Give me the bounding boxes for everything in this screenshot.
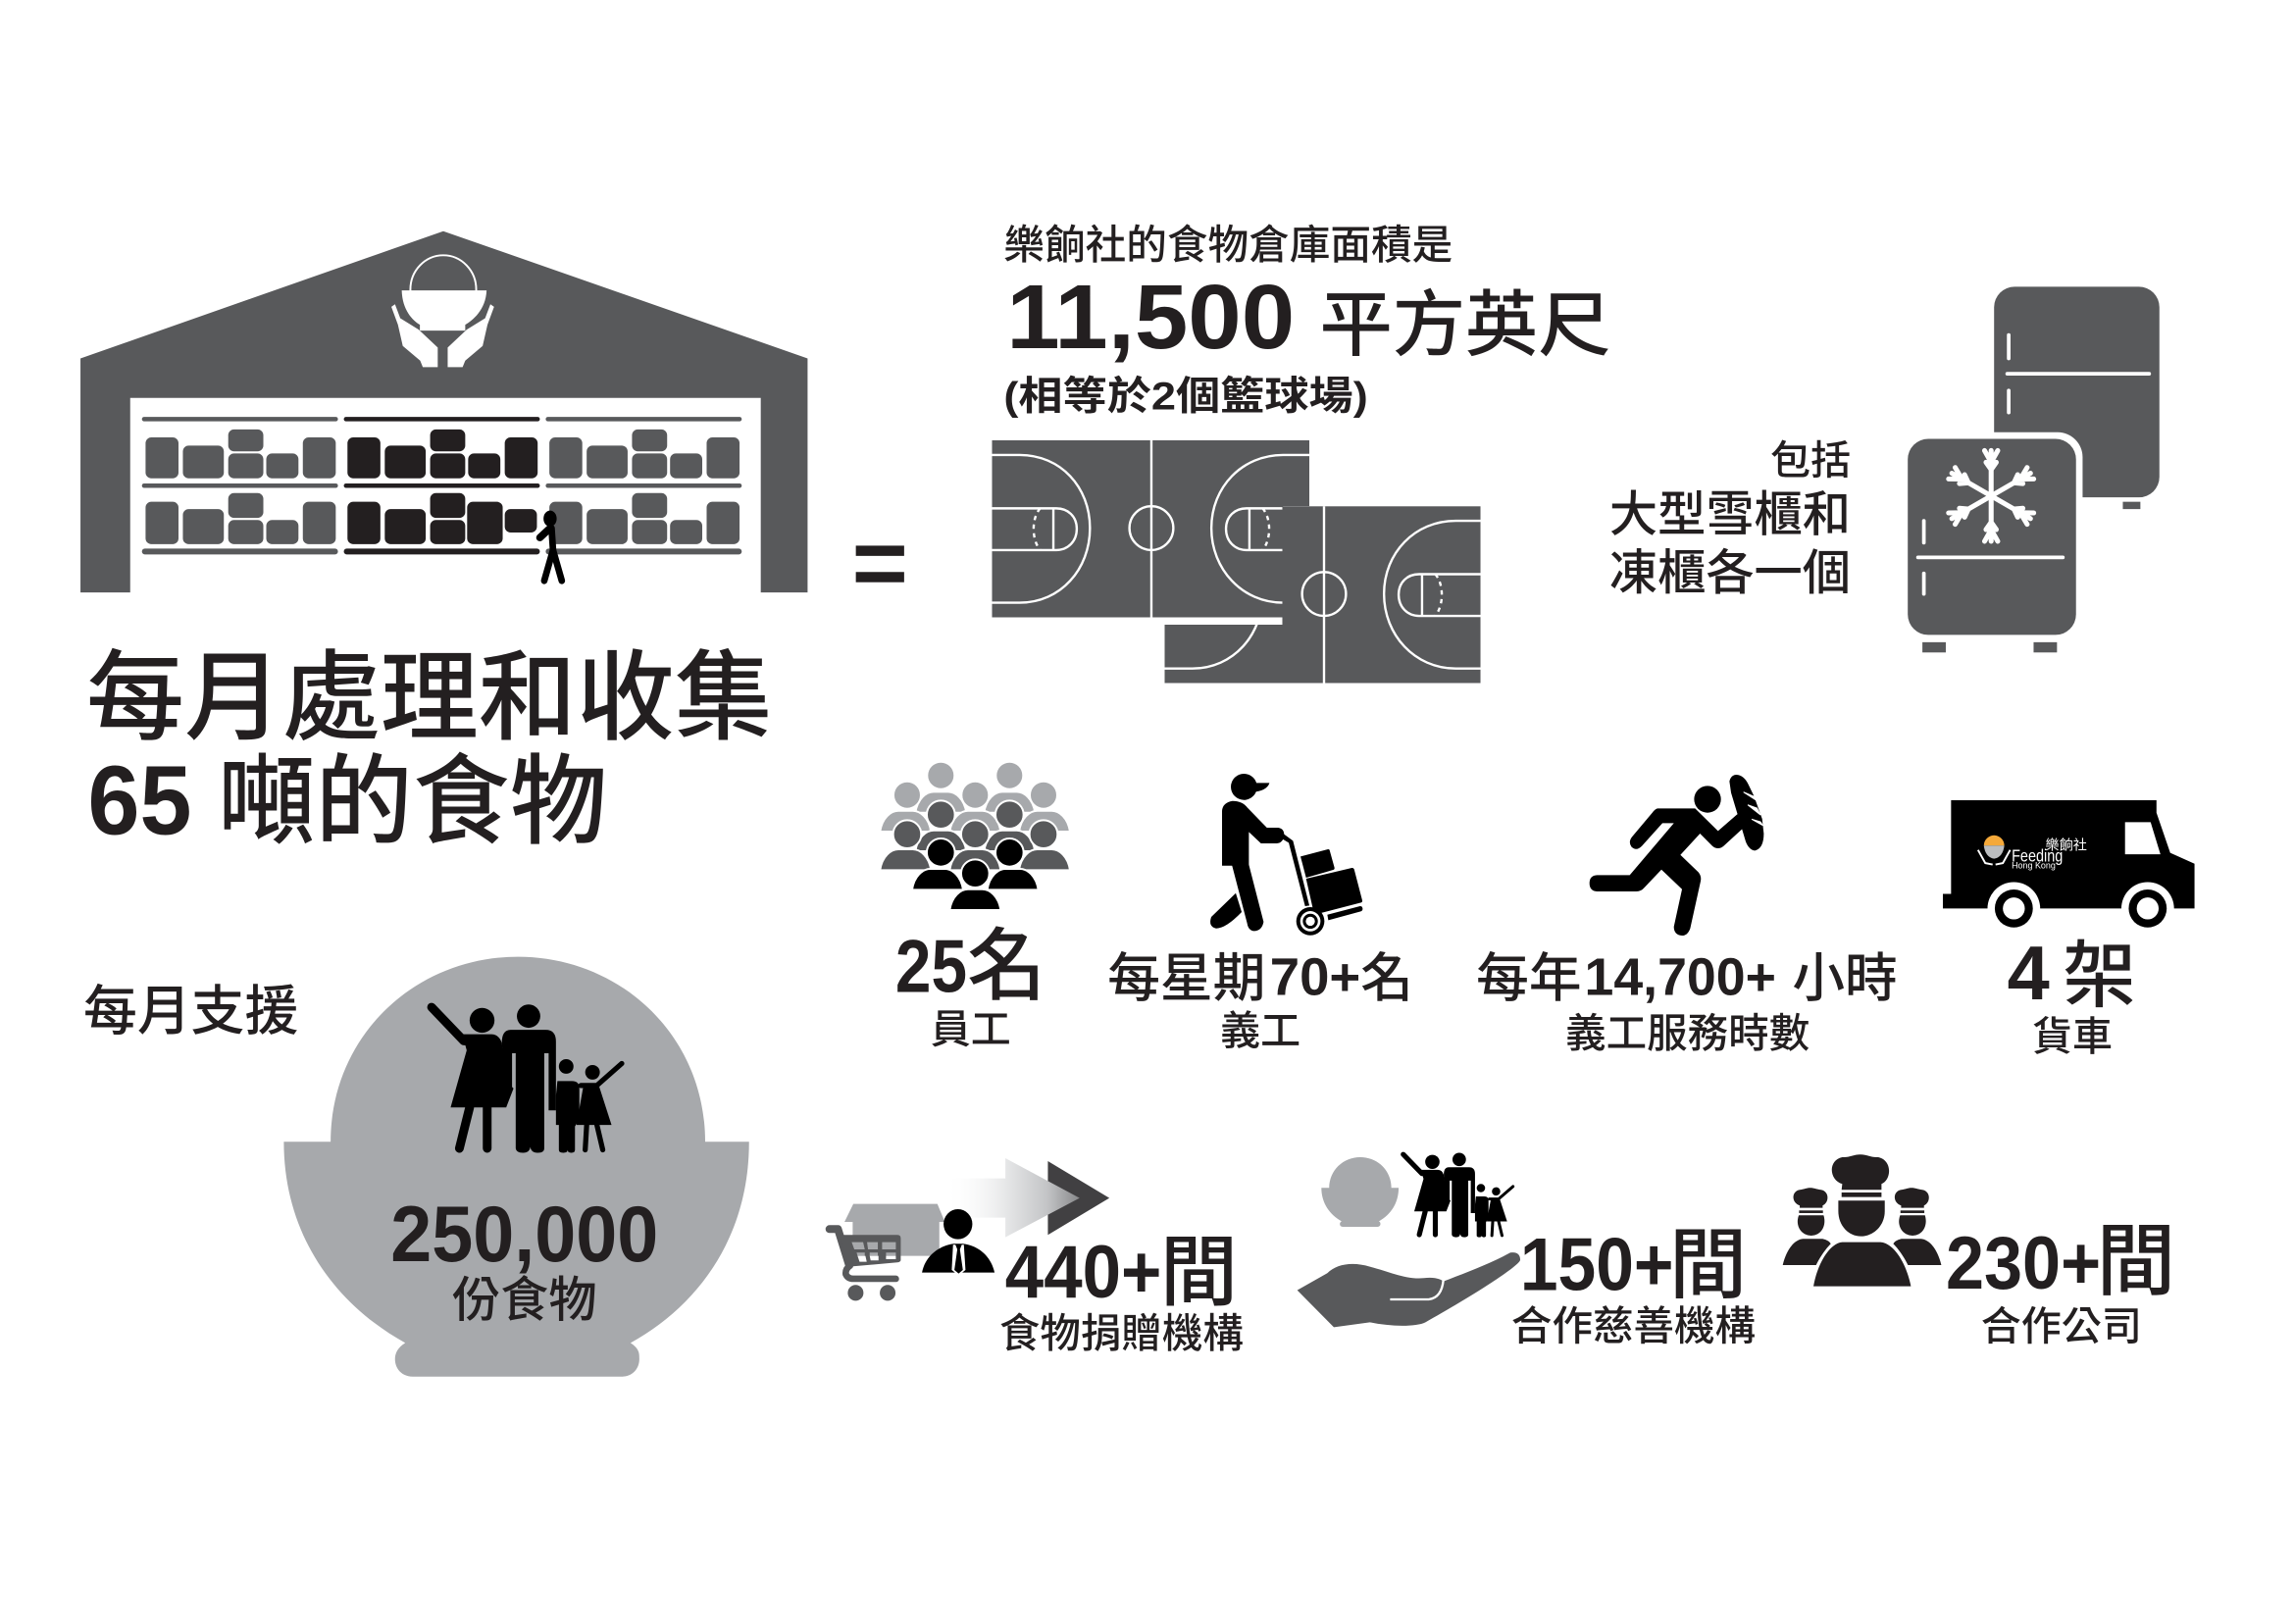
equals sign (856, 545, 904, 583)
icon: donor with shop, trolley and arrow (830, 1158, 1109, 1300)
trucks number: 架 (2063, 934, 2136, 1016)
bowl with family and meals (283, 957, 749, 1377)
icon: runner with baguette (1590, 775, 1763, 936)
main headline: 噸的食物 (218, 748, 607, 857)
icon: crowd (880, 762, 1070, 910)
icon: snowflake (1949, 450, 2034, 541)
freezer (1901, 432, 2082, 652)
hours label: 義工服務時數 (1565, 1010, 1810, 1056)
truck logo: Hong Kong (2012, 860, 2056, 870)
icon: three chefs (1783, 1154, 1941, 1287)
main headline (86, 644, 773, 857)
area unit: 平方英尺 (1320, 286, 1610, 366)
hours number: 小時 (1792, 949, 1898, 1008)
volunteers number: 70+ (1270, 947, 1360, 1006)
truck logo: Feeding (2012, 846, 2063, 866)
staff number (895, 923, 1046, 1011)
stat: food donors (830, 1158, 1244, 1356)
volunteers number (1107, 947, 1413, 1008)
donors number: 440+ (1005, 1231, 1161, 1314)
stat: volunteers (1107, 774, 1413, 1053)
shelves and boxes (142, 417, 741, 554)
companies number: 230+ (1946, 1222, 2101, 1305)
truck logo (1978, 836, 2087, 870)
charity number: 150+ (1520, 1224, 1674, 1307)
warehouse area text (1003, 222, 1610, 419)
volunteers label: 義工 (1220, 1008, 1300, 1053)
area intro: 樂餉社的食物倉庫面積是 (1003, 222, 1453, 268)
companies label: 合作公司 (1981, 1303, 2142, 1348)
charity number: 間 (1669, 1221, 1747, 1308)
icon: delivery truck (1943, 800, 2195, 935)
icon: family (432, 1004, 622, 1152)
donors number (1005, 1229, 1238, 1316)
area number: 11,500 (1006, 266, 1295, 368)
freezer text: 凍櫃各一個 (1609, 546, 1851, 600)
volunteers number: 名 (1360, 949, 1413, 1008)
meals label: 份食物 (452, 1274, 597, 1328)
hours number: 每年 (1476, 949, 1582, 1008)
main headline: 每月處理和收集 (86, 644, 773, 753)
volunteers number: 每星期 (1107, 949, 1265, 1008)
icon: fridge and freezer (1901, 286, 2160, 652)
icon: bowl and family over open hand (1298, 1153, 1520, 1327)
donors number: 間 (1160, 1229, 1238, 1316)
donors label: 食物捐贈機構 (999, 1310, 1244, 1356)
fridge (1994, 286, 2160, 509)
staff number: 25 (895, 925, 967, 1008)
icon: bowl and hands logo (391, 255, 494, 367)
warehouse illustration (80, 231, 807, 592)
companies number (1946, 1218, 2175, 1306)
icon: worker loading shelf (539, 511, 562, 581)
freezer text: 包括 (1770, 437, 1851, 482)
truck logo: 樂餉社 (2045, 837, 2087, 854)
stat: charity partners (1298, 1153, 1756, 1348)
hours number: 14,700+ (1585, 947, 1776, 1006)
stat: trucks (1943, 800, 2195, 1059)
monthly support label: 每月支援 (83, 981, 298, 1041)
staff label: 員工 (931, 1007, 1011, 1052)
freezer text: 大型雪櫃和 (1609, 487, 1851, 541)
companies number: 間 (2097, 1218, 2175, 1306)
stat: volunteer hours (1476, 775, 1898, 1056)
charity label: 合作慈善機構 (1511, 1302, 1756, 1348)
basketball courts (992, 440, 1482, 684)
stat: company partners (1783, 1154, 2175, 1348)
meals number: 250,000 (390, 1191, 658, 1279)
area comparison note: (相等於2個籃球場) (1003, 375, 1368, 419)
bowl (283, 957, 749, 1377)
staff number: 名 (967, 923, 1046, 1011)
icon: delivery worker with trolley (1210, 774, 1362, 936)
trucks number (2008, 932, 2136, 1016)
hours number (1476, 947, 1898, 1008)
main headline: 65 (88, 746, 191, 855)
trucks label: 貨車 (2032, 1014, 2113, 1059)
freezer text (1609, 437, 1851, 600)
stat: staff (880, 762, 1070, 1052)
warehouse building (80, 231, 807, 592)
trucks number: 4 (2008, 932, 2050, 1016)
